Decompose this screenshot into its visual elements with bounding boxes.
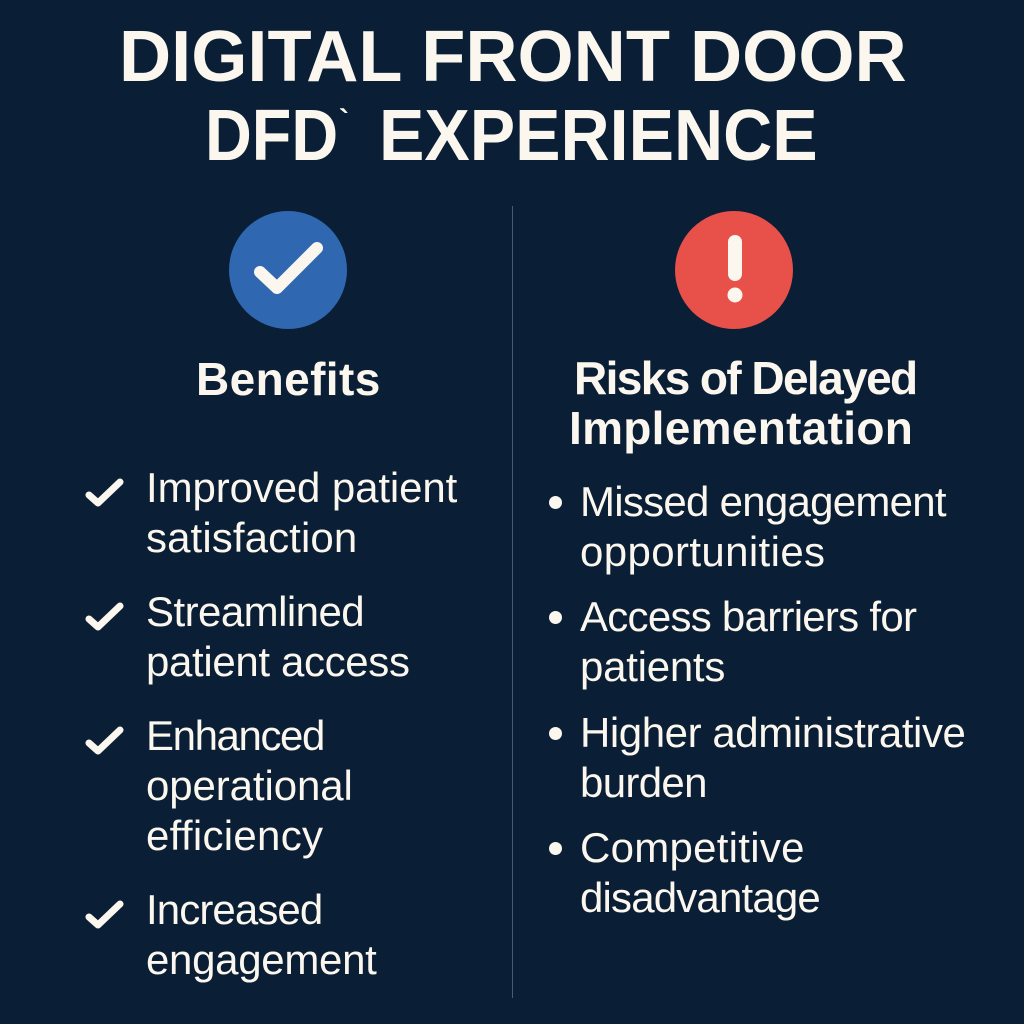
risk 3 xyxy=(549,709,965,806)
risk 4: Competitive xyxy=(580,824,805,871)
benefit 2 xyxy=(86,588,410,685)
benefit 4 xyxy=(86,886,377,983)
title: DFD xyxy=(204,96,338,176)
title xyxy=(119,17,907,176)
panel: risks xyxy=(549,211,965,921)
benefit 3: efficiency xyxy=(146,812,323,859)
title: DIGITAL FRONT DOOR xyxy=(119,17,907,97)
risk 2: patients xyxy=(580,643,725,690)
benefit 1: satisfaction xyxy=(146,514,357,561)
risk 1 xyxy=(549,478,946,575)
risk 4: disadvantage xyxy=(580,874,820,921)
title: EXPERIENCE xyxy=(379,96,818,176)
heading: risks xyxy=(569,352,917,454)
risk 3: burden xyxy=(580,759,707,806)
benefit 1: Improved patient xyxy=(146,464,457,511)
benefit 3: operational xyxy=(146,762,353,809)
title: ` xyxy=(339,104,349,137)
risk 1: Missed engagement xyxy=(580,478,946,525)
heading: risks: Implementation xyxy=(569,402,913,454)
risk 2 xyxy=(549,593,916,690)
icon: blue check circle xyxy=(229,211,347,329)
risk 2: Access barriers for xyxy=(580,593,916,640)
benefit 4: Increased xyxy=(146,886,322,933)
panel: benefits xyxy=(86,211,457,983)
icon: red exclamation circle xyxy=(675,211,793,329)
benefit 2: Streamlined xyxy=(146,588,364,635)
benefit 3 xyxy=(86,712,353,859)
benefit 2: patient access xyxy=(146,638,410,685)
divider xyxy=(512,206,513,998)
risk 1: opportunities xyxy=(580,528,825,575)
benefit 3: Enhanced xyxy=(146,712,324,759)
heading: benefits: Benefits xyxy=(196,353,381,405)
benefit 1 xyxy=(86,464,457,561)
risk 4 xyxy=(549,824,820,921)
benefit 4: engagement xyxy=(146,936,377,983)
heading: risks: Risks of Delayed xyxy=(574,352,917,404)
risk 3: Higher administrative xyxy=(580,709,965,756)
